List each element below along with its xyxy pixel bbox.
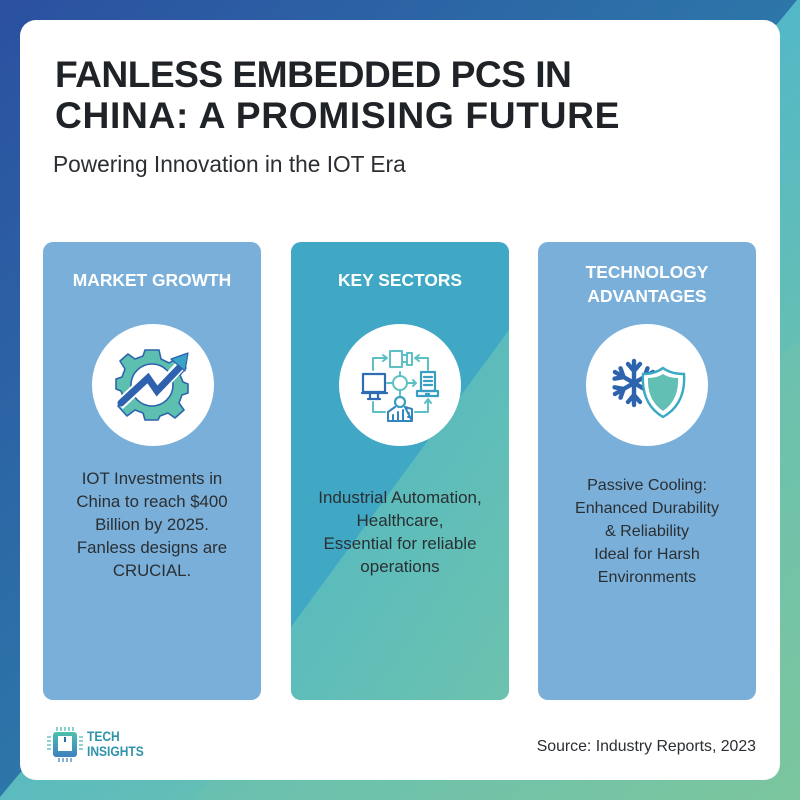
title: CHINA: A PROMISING FUTURE	[55, 94, 620, 136]
icon: gear with rising arrow	[92, 324, 214, 446]
title: FANLESS EMBEDDED PCS IN	[55, 53, 571, 95]
subtitle: Powering Innovation in the IOT Era	[53, 151, 406, 177]
logo wordmark: INSIGHTS	[87, 744, 144, 758]
heading: market growth: MARKET GROWTH	[73, 270, 231, 290]
text: key sectors	[318, 488, 482, 576]
icon: chip	[47, 727, 83, 762]
text: market growth: Fanless designs are	[77, 538, 227, 557]
text: technology advantages: Environments	[598, 568, 696, 586]
heading: technology advantages: ADVANTAGES	[587, 286, 707, 306]
text: market growth: China to reach $400	[76, 492, 228, 511]
logo: tech insights	[47, 727, 144, 762]
icon: connected sectors	[339, 324, 461, 446]
text: key sectors: Industrial Automation,	[318, 488, 482, 507]
text: technology advantages	[575, 476, 719, 586]
heading: technology advantages	[586, 262, 708, 306]
logo wordmark: TECH	[87, 729, 120, 744]
text: key sectors: Healthcare,	[357, 511, 443, 530]
text: technology advantages: Passive Cooling:	[587, 476, 707, 494]
text: market growth: CRUCIAL.	[113, 561, 191, 580]
text: technology advantages: Ideal for Harsh	[594, 545, 700, 563]
source: Source: Industry Reports, 2023	[537, 738, 756, 755]
text: market growth: IOT Investments in	[82, 469, 222, 488]
text: market growth: Billion by 2025.	[95, 515, 209, 534]
heading: technology advantages: TECHNOLOGY	[586, 262, 708, 282]
panel: market growth	[43, 242, 261, 700]
panel gradient facet	[291, 330, 509, 700]
panel: key sectors	[291, 242, 509, 700]
text: technology advantages: Enhanced Durability	[575, 499, 719, 517]
text: key sectors: operations	[360, 557, 440, 576]
icon: snowflake and shield	[586, 324, 708, 446]
text: key sectors: Essential for reliable	[323, 534, 477, 553]
text: market growth	[76, 469, 228, 580]
logo wordmark	[87, 729, 144, 758]
panel: technology advantages	[538, 242, 756, 700]
title	[55, 53, 620, 136]
heading: key sectors: KEY SECTORS	[338, 270, 462, 290]
text: technology advantages: & Reliability	[605, 522, 689, 540]
